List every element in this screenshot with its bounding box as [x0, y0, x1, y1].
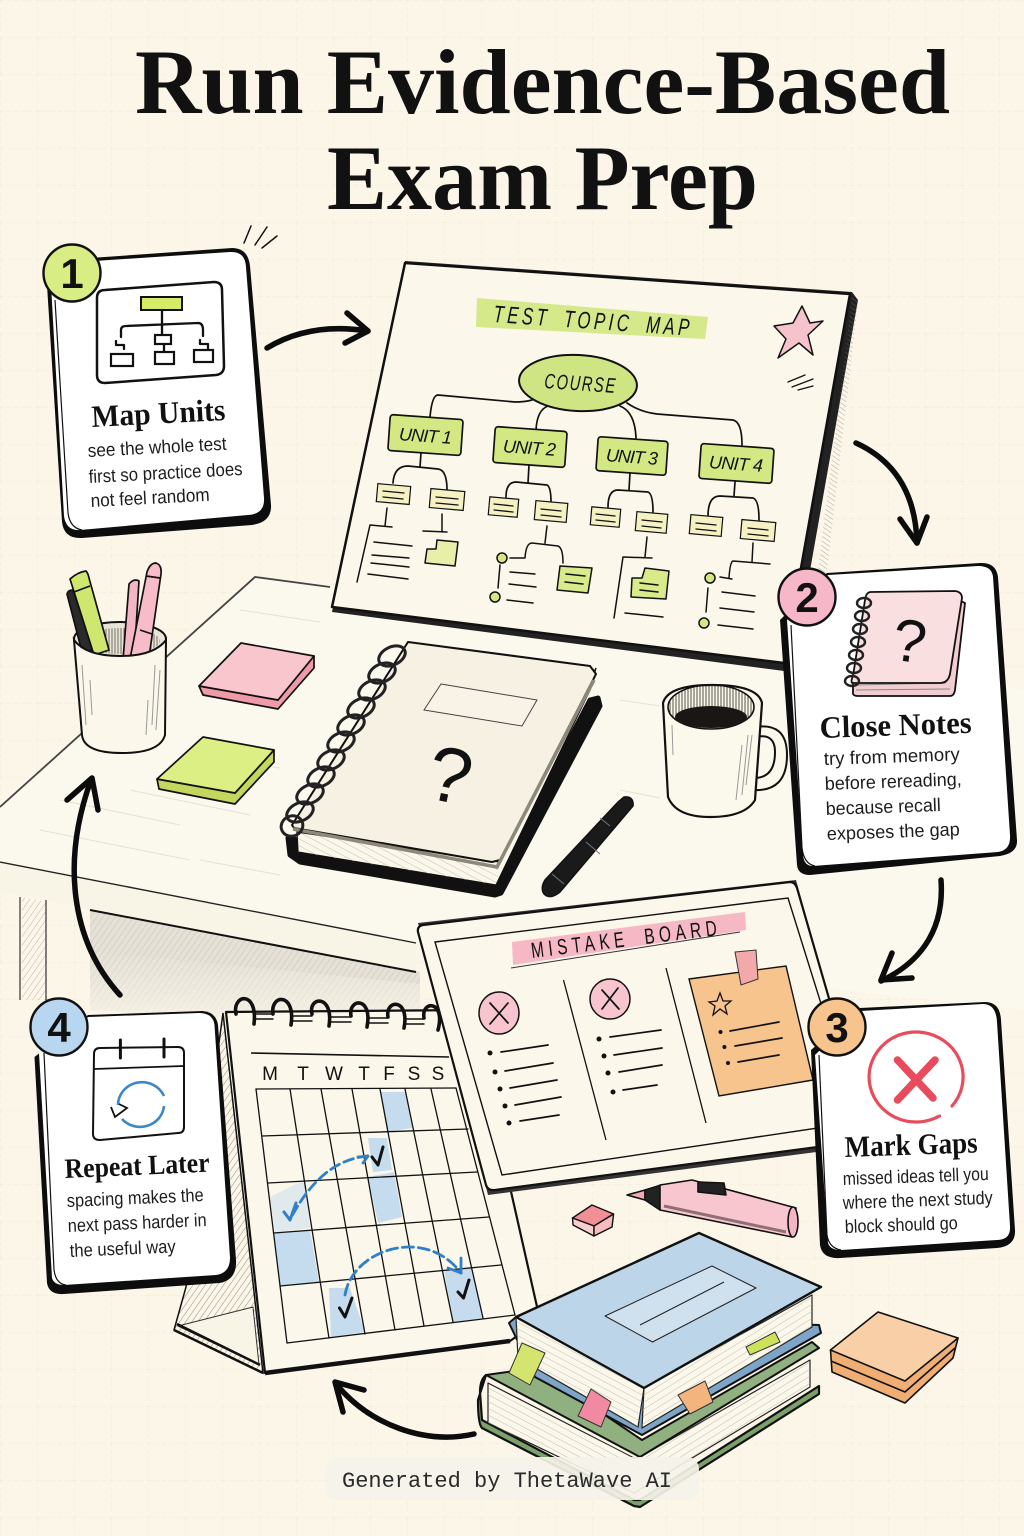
cup opening [74, 622, 166, 656]
description: try from memory [823, 743, 961, 769]
green book spine and lower cover [478, 1375, 819, 1507]
weekday headers: W [325, 1064, 343, 1085]
panel: step 1 map units [44, 244, 271, 538]
unit 2 details [490, 526, 592, 603]
desk [0, 577, 1024, 1040]
unit 2: UNIT 2 [502, 436, 557, 460]
orange sticky stack [830, 1312, 958, 1403]
description: see the whole test [87, 433, 227, 461]
pens [67, 563, 161, 664]
title [135, 31, 950, 229]
arrow: step 1 to map [267, 313, 368, 348]
check marks [284, 1147, 469, 1317]
coffee [675, 706, 747, 728]
topic boxes [376, 484, 776, 541]
cup shading [82, 665, 160, 735]
body [663, 685, 762, 817]
spaced repetition arrows [292, 1156, 461, 1295]
question mark: ? [419, 728, 480, 823]
x mark 1 [479, 992, 519, 1034]
badge 1 [44, 244, 100, 302]
title: Exam Prep [327, 127, 758, 229]
description: missed ideas tell you [842, 1163, 989, 1189]
description: not feel random [90, 484, 210, 511]
panel: test topic map board [332, 261, 858, 672]
desk calendar [174, 999, 540, 1373]
heading: map units: Map Units [91, 392, 226, 434]
pages [297, 668, 596, 885]
opening [668, 685, 754, 729]
unit 4 details [699, 543, 770, 629]
pen holder [67, 563, 166, 753]
sticky pad: pink [199, 643, 314, 709]
icon: org chart [97, 282, 224, 383]
description: exposes the gap [826, 818, 960, 844]
mug shading [672, 725, 752, 800]
topic box text lines [383, 491, 768, 536]
back cover [288, 698, 600, 895]
unit 3 details [614, 537, 669, 618]
description: block should go [844, 1212, 958, 1237]
spark ticks near card 1 [244, 226, 277, 248]
badge 4: 4 [47, 1004, 71, 1051]
column dividers [564, 968, 706, 1140]
blue book [509, 1317, 821, 1435]
handle [753, 726, 787, 790]
panel: step 4 repeat later [30, 998, 236, 1294]
icon: notebook [845, 591, 965, 696]
highlighter [627, 1180, 798, 1237]
arrow: step 2 to step 3 [881, 880, 941, 981]
x mark 2 [590, 979, 630, 1019]
heading: mistake board: MISTAKE BOARD [530, 916, 723, 964]
star doodle [774, 306, 823, 390]
pen [542, 797, 633, 897]
description: spacing makes the [66, 1184, 204, 1211]
badge 3 [808, 998, 866, 1056]
arrow: map to step 2 [856, 443, 927, 543]
heading: mark gaps: Mark Gaps [844, 1126, 978, 1164]
arrow: calendar side back to desk [67, 778, 120, 995]
description: before rereading, [824, 768, 962, 794]
unit 2 [493, 427, 567, 467]
notebook with question mark [278, 642, 600, 895]
heading highlight [512, 912, 746, 965]
course node: COURSE [544, 370, 618, 398]
spiral binding [236, 999, 440, 1030]
calendar grid [256, 1088, 515, 1343]
footer credit: Generated by ThetaWave AI [342, 1469, 672, 1494]
description [87, 433, 243, 511]
description: next pass harder in [67, 1209, 207, 1236]
unit 1 details [357, 508, 458, 582]
heading: test topic map: TEST TOPIC MAP [493, 301, 694, 342]
unit 1: UNIT 1 [398, 424, 453, 448]
description: because recall [825, 794, 941, 819]
description: the useful way [69, 1235, 177, 1261]
unit 4 [699, 443, 774, 483]
calendar stand [174, 1013, 263, 1373]
icon: red x in circle [869, 1032, 963, 1122]
badge 1: 1 [60, 250, 84, 297]
bookmarks [509, 1332, 780, 1427]
description [823, 743, 962, 844]
spiral rings [278, 642, 408, 840]
description: where the next study [842, 1187, 994, 1213]
panel: step 2 close notes [778, 563, 1017, 875]
course node [518, 352, 638, 414]
footer credit [326, 1457, 699, 1500]
icon: notebook: ? [888, 606, 931, 677]
eraser [572, 1205, 614, 1236]
weekday headers [262, 1064, 444, 1085]
cover [292, 642, 596, 862]
heading: close notes: Close Notes [819, 705, 972, 745]
icon: repeat calendar [93, 1039, 184, 1140]
highlighted days [270, 1092, 483, 1337]
unit 4: UNIT 4 [708, 452, 764, 476]
title: Run Evidence-Based [135, 31, 950, 133]
description [842, 1163, 994, 1237]
panel: mistake board [418, 880, 870, 1195]
coffee mug [663, 685, 787, 817]
badge 2: 2 [795, 574, 819, 621]
book stack [478, 1233, 821, 1507]
arrow: books to calendar [335, 1382, 474, 1437]
weekday headers: S [408, 1064, 420, 1085]
weekday headers: F [383, 1064, 395, 1085]
calendar page [226, 1010, 540, 1373]
badge 2 [778, 568, 836, 626]
heading: repeat later: Repeat Later [64, 1148, 210, 1185]
sticky pad: green [157, 737, 274, 804]
description [66, 1184, 207, 1261]
unit 3 [596, 437, 668, 475]
badge 4 [30, 998, 88, 1056]
weekday headers: S [432, 1064, 444, 1085]
panel: step 3 mark gaps [808, 998, 1015, 1258]
orange note [689, 950, 813, 1096]
weekday headers: T [358, 1064, 370, 1085]
connectors [393, 395, 759, 520]
weekday headers: M [262, 1064, 278, 1085]
column 2 list [596, 1030, 662, 1094]
unit 1 [388, 415, 463, 456]
weekday headers: T [297, 1064, 309, 1085]
green top cover [486, 1342, 819, 1457]
column 1 list [488, 1045, 561, 1126]
unit 3: UNIT 3 [605, 445, 659, 469]
badge 3: 3 [825, 1004, 849, 1051]
green pages [488, 1360, 810, 1493]
heading highlight [476, 298, 708, 339]
cup front [74, 640, 166, 753]
description: first so practice does [88, 458, 243, 487]
